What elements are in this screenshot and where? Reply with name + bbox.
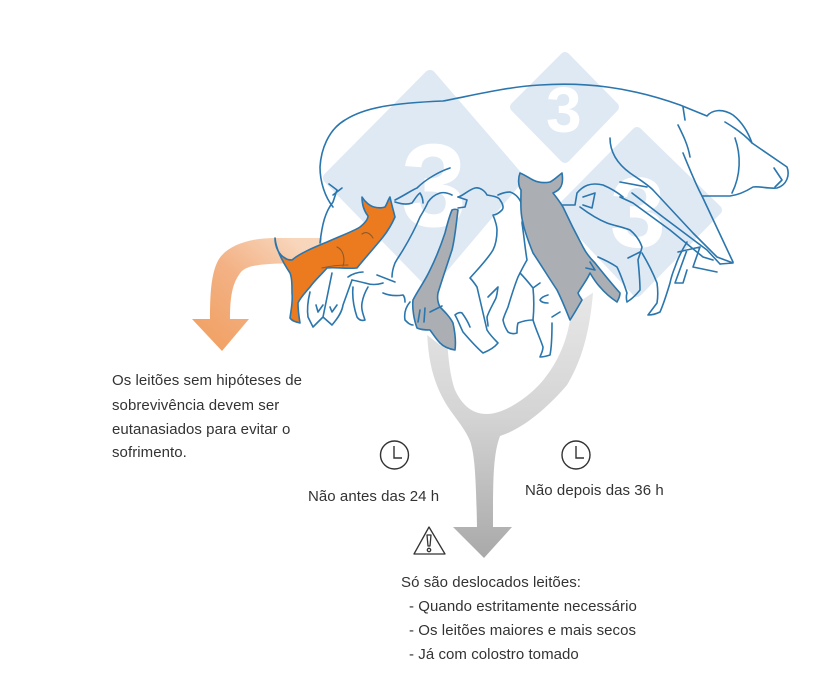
- illustration: white piglets: [348, 184, 687, 357]
- text: euthanasia note: sobrevivência devem ser: [112, 397, 279, 414]
- piglet 2: [377, 193, 452, 325]
- piglets white silhouette: [350, 183, 690, 358]
- watermark diamond left: [329, 76, 518, 282]
- piglet 1: [348, 193, 423, 320]
- piglet: orange details: [322, 233, 373, 268]
- text: euthanasia note: [112, 372, 302, 461]
- icon: clock right: [562, 441, 590, 469]
- text: euthanasia note: eutanasiados para evitar o: [112, 421, 290, 438]
- piglet 6: [562, 184, 642, 302]
- piglet: grey left feet: [418, 306, 442, 322]
- watermark diamond top: 3: [546, 74, 582, 146]
- piglet: grey right: [519, 173, 620, 320]
- text: euthanasia note: sofrimento.: [112, 444, 187, 461]
- arrow: orange curved arrow to euthanasia: [192, 238, 322, 351]
- watermark diamond right: 3: [610, 157, 666, 269]
- piglet 4: [498, 192, 533, 334]
- arrow: grey forked arrow to fostering: [427, 280, 594, 558]
- piglet 5: [520, 273, 560, 357]
- text: fostering conditions: [401, 574, 637, 663]
- piglet: grey left: [413, 209, 458, 350]
- watermark diamond right: [560, 132, 717, 292]
- text: euthanasia note: Os leitões sem hipóteses de: [112, 372, 302, 389]
- watermark diamond top: [515, 57, 614, 158]
- text: fostering conditions: Só são deslocados leitões:: [401, 574, 581, 591]
- illustration: sow outline: [308, 84, 788, 327]
- text: not after 36 h: Não depois das 36 h: [525, 482, 664, 499]
- icon: clock left: [380, 441, 408, 469]
- text: not before 24 h: Não antes das 24 h: [308, 488, 439, 505]
- text: fostering conditions: - Os leitões maiores e mais secos: [409, 622, 636, 639]
- piglet: grey right foot: [586, 262, 595, 270]
- text: fostering conditions: - Já com colostro tomado: [409, 646, 579, 663]
- watermark diamond left: 3: [401, 120, 467, 252]
- watermark: diamond logos: [329, 57, 717, 292]
- text: fostering conditions: - Quando estritamente necessário: [409, 598, 637, 615]
- piglet 3: [455, 188, 503, 353]
- icon: warning triangle: [414, 527, 445, 554]
- piglet: orange, non viable: [275, 197, 395, 323]
